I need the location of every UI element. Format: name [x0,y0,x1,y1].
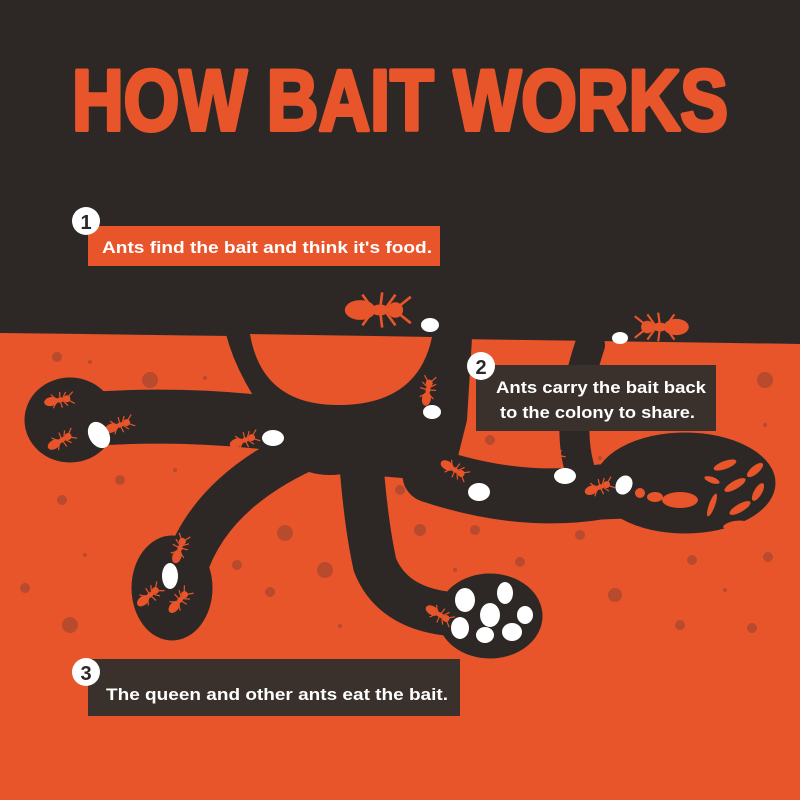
larvae [703,457,772,531]
step 1 callout [72,207,440,266]
step 3 callout [72,658,460,716]
soil dots [20,352,773,633]
tunnels [25,334,775,658]
step 3 callout: 3 [80,663,92,685]
step 3 callout: The queen and other ants eat the bait. [106,685,448,704]
ground soil [0,333,800,800]
orange bowl between shafts [250,334,432,405]
step 1 callout: Ants find the bait and think it's food. [102,238,432,257]
step 2 callout: Ants carry the bait back [496,378,707,397]
step 2 callout: to the colony to share. [500,403,695,422]
queen ant [635,488,698,508]
ants [43,292,689,629]
step 1 callout: 1 [80,212,92,234]
step 2 callout [467,352,716,431]
bait pieces [83,318,636,643]
step 2 callout: 2 [475,357,487,379]
